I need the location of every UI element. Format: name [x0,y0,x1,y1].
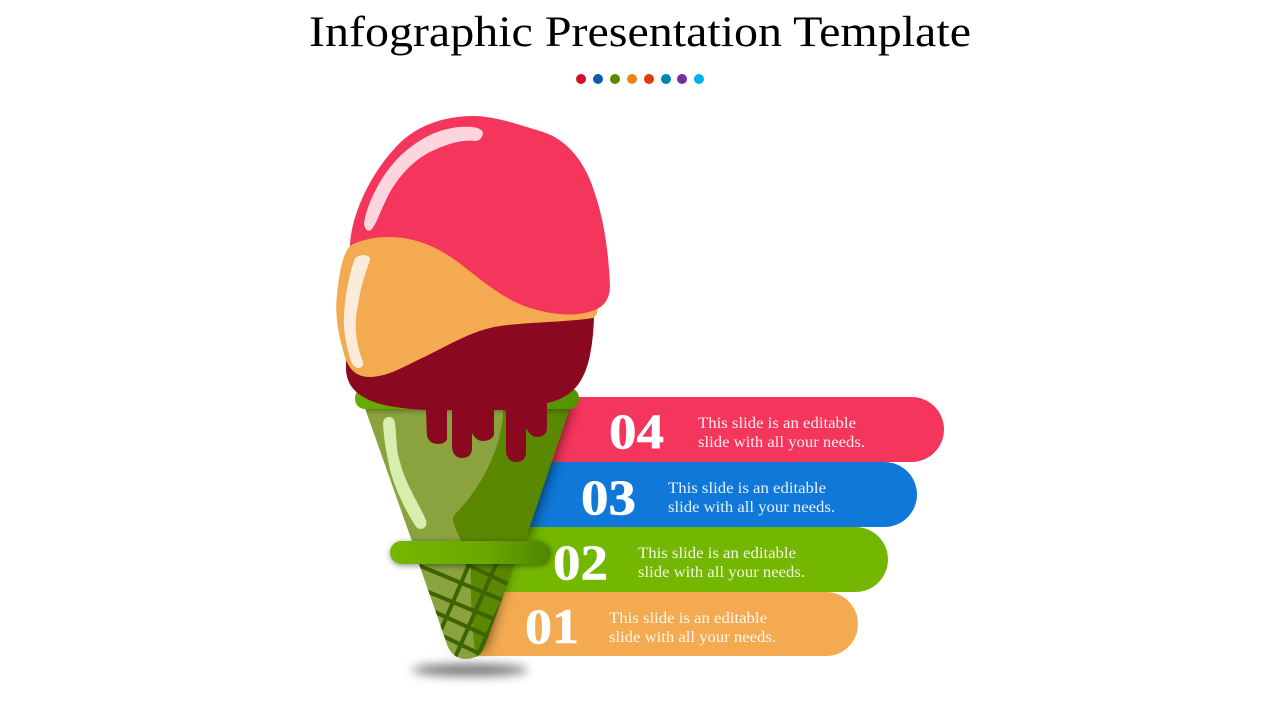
ground shadow [412,664,528,676]
bar 04 [540,397,944,462]
ice cream scoops [336,116,610,462]
bar 02: This slide is an editable [638,545,796,562]
orange scoop [336,228,598,377]
upper cone [365,408,570,541]
maroon scoop with drips [346,300,594,462]
pink scoop [350,116,610,314]
bar 02: 02 [553,534,608,590]
orange highlight [344,255,370,368]
title dots [576,74,704,84]
band shadow [390,542,551,566]
bar 02 [490,527,888,592]
lower cone dark side [471,564,515,657]
bar 03: 03 [581,469,636,525]
bar 01 [470,592,858,656]
cone shadow on bars [440,400,580,657]
upper cone light side [365,408,503,541]
bar 04: This slide is an editable [698,415,856,432]
bar 01: slide with all your needs. [609,629,776,646]
title: Infographic Presentation Template [309,9,971,56]
cone highlight [383,417,426,529]
bar 03: This slide is an editable [668,480,826,497]
rim shadow [366,409,570,414]
cone rim [355,388,579,409]
lower cone [419,564,515,659]
waffle lines [419,564,508,658]
bar 03: slide with all your needs. [668,499,835,516]
bar 03 [510,462,917,527]
ice cream cone [355,388,579,660]
bar 04: slide with all your needs. [698,434,865,451]
bar 04: 04 [609,403,664,459]
bar 02: slide with all your needs. [638,564,805,581]
cone band [390,541,549,564]
bar 01: This slide is an editable [609,610,767,627]
pink highlight [364,127,483,231]
bar 01: 01 [525,598,579,654]
